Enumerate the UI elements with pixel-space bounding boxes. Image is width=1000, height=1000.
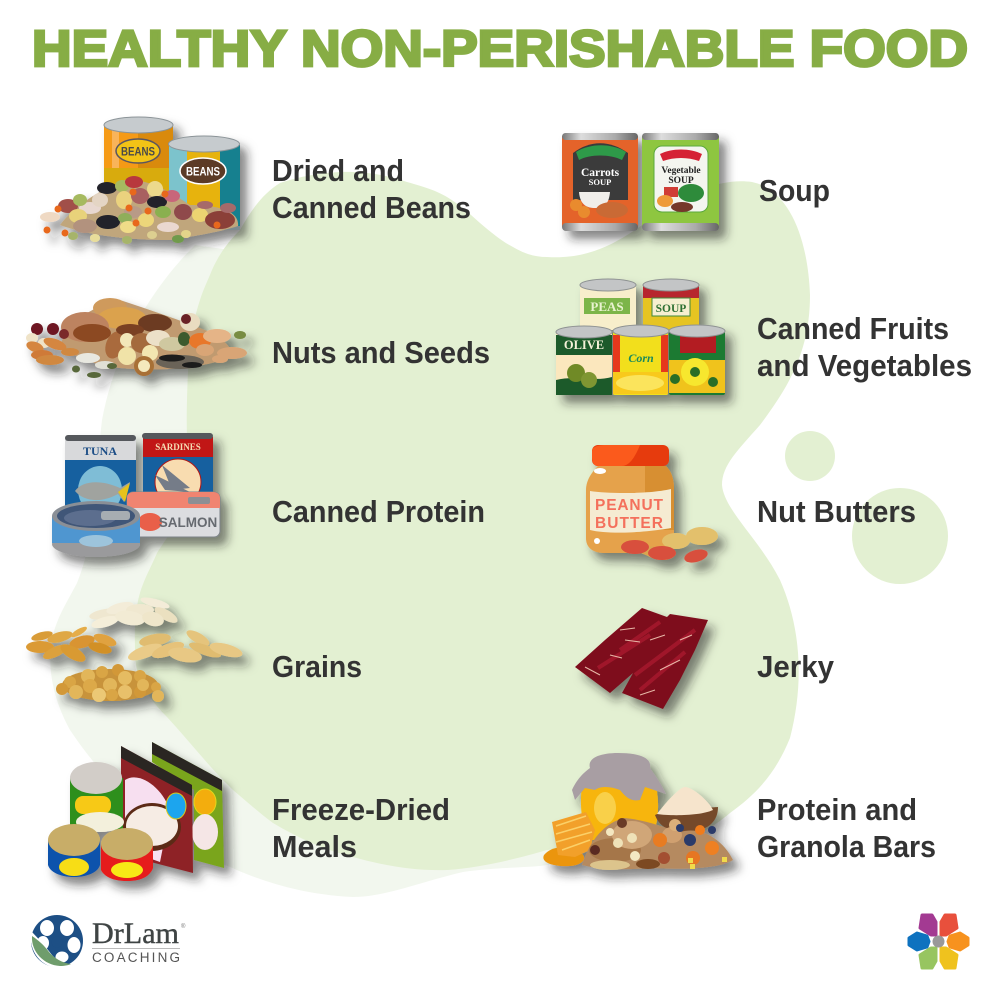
- icon: peanut butter jar: [586, 445, 718, 565]
- item: soup: [562, 133, 830, 231]
- logo registered mark: ®: [181, 923, 186, 930]
- decorative small circle: [785, 431, 835, 481]
- petal yellow: [941, 948, 957, 968]
- label line 1: Protein and: [757, 792, 917, 827]
- icon: peanut butter jar: PEANUT: [595, 497, 664, 514]
- item: grains: [26, 595, 362, 702]
- icon: bean cans and pile: BEANS: [186, 164, 220, 178]
- icon: soup cans: Carrots: [581, 167, 620, 179]
- label: Nuts and Seeds: [272, 335, 490, 370]
- petal purple: [920, 915, 936, 935]
- logo text: Coaching: COACHING: [92, 950, 180, 965]
- item: canned protein: [52, 433, 485, 557]
- label line 1: Canned Fruits: [757, 311, 949, 346]
- decorative large circle: [852, 488, 948, 584]
- icon: stacked veg cans: [556, 279, 725, 395]
- item: nut butters: [586, 445, 916, 565]
- icon: honey, flour and trail mix: [543, 753, 733, 870]
- icon: stacked veg cans: SOUP: [656, 303, 686, 315]
- background blob: main green: [135, 172, 810, 870]
- label line 2: Granola Bars: [757, 829, 936, 864]
- icon: fish cans: TUNA: [83, 444, 117, 458]
- icon: grain piles: [26, 595, 244, 702]
- logo divider: [92, 948, 180, 949]
- icon: fish cans: SALMON: [159, 515, 217, 530]
- icon: bean cans and pile: [40, 117, 240, 244]
- icon: nuts and seeds pile: [25, 298, 247, 378]
- item: jerky: [575, 608, 835, 709]
- item: dried and canned beans: [40, 117, 471, 244]
- label line 2: Canned Beans: [272, 190, 471, 225]
- icon: stacked veg cans: OLIVE: [564, 338, 604, 352]
- icon: soup cans: [562, 133, 719, 231]
- title: HEALTHY NON-PERISHABLE FOOD: [32, 20, 968, 77]
- icon: fish cans: SARDINES: [155, 442, 201, 452]
- icon: soup cans: Vegetable: [661, 166, 701, 176]
- flower centre: [932, 936, 944, 948]
- item: freeze-dried meals: [48, 742, 450, 881]
- background blob: pale layer: [50, 245, 610, 897]
- label: Jerky: [757, 649, 835, 684]
- label line 1: Dried and: [272, 153, 404, 188]
- icon: stacked veg cans: PEAS: [590, 299, 624, 314]
- label line 2: and Vegetables: [757, 348, 972, 383]
- icon: jerky strips: [575, 608, 708, 709]
- icon: soup cans: SOUP: [589, 177, 611, 187]
- logo: DrLam Coaching: [31, 915, 186, 968]
- icon: stacked veg cans: Corn: [628, 351, 654, 365]
- logo mark: [31, 915, 83, 968]
- label: Grains: [272, 649, 362, 684]
- item: canned fruits and vegetables: [556, 279, 972, 395]
- label: Nut Butters: [757, 494, 916, 529]
- petal blue: [909, 933, 929, 950]
- label line 2: Meals: [272, 829, 357, 864]
- label: Canned Protein: [272, 494, 485, 529]
- item: nuts and seeds: [25, 298, 490, 378]
- icon: fish cans: [52, 433, 220, 557]
- item: protein and granola bars: [543, 753, 936, 870]
- logo text: DrLam: DrLam: [92, 917, 179, 950]
- petal green: [920, 948, 936, 968]
- icon: soup cans: SOUP: [668, 176, 694, 186]
- label: Soup: [759, 173, 830, 208]
- petal red: [941, 915, 957, 935]
- icon: pouches and cans: [48, 742, 224, 881]
- logo: colour flower: [909, 915, 968, 968]
- icon: peanut butter jar: BUTTER: [595, 515, 663, 532]
- icon: bean cans and pile: BEANS: [121, 144, 155, 158]
- label line 1: Freeze-Dried: [272, 792, 450, 827]
- petal orange: [948, 933, 968, 950]
